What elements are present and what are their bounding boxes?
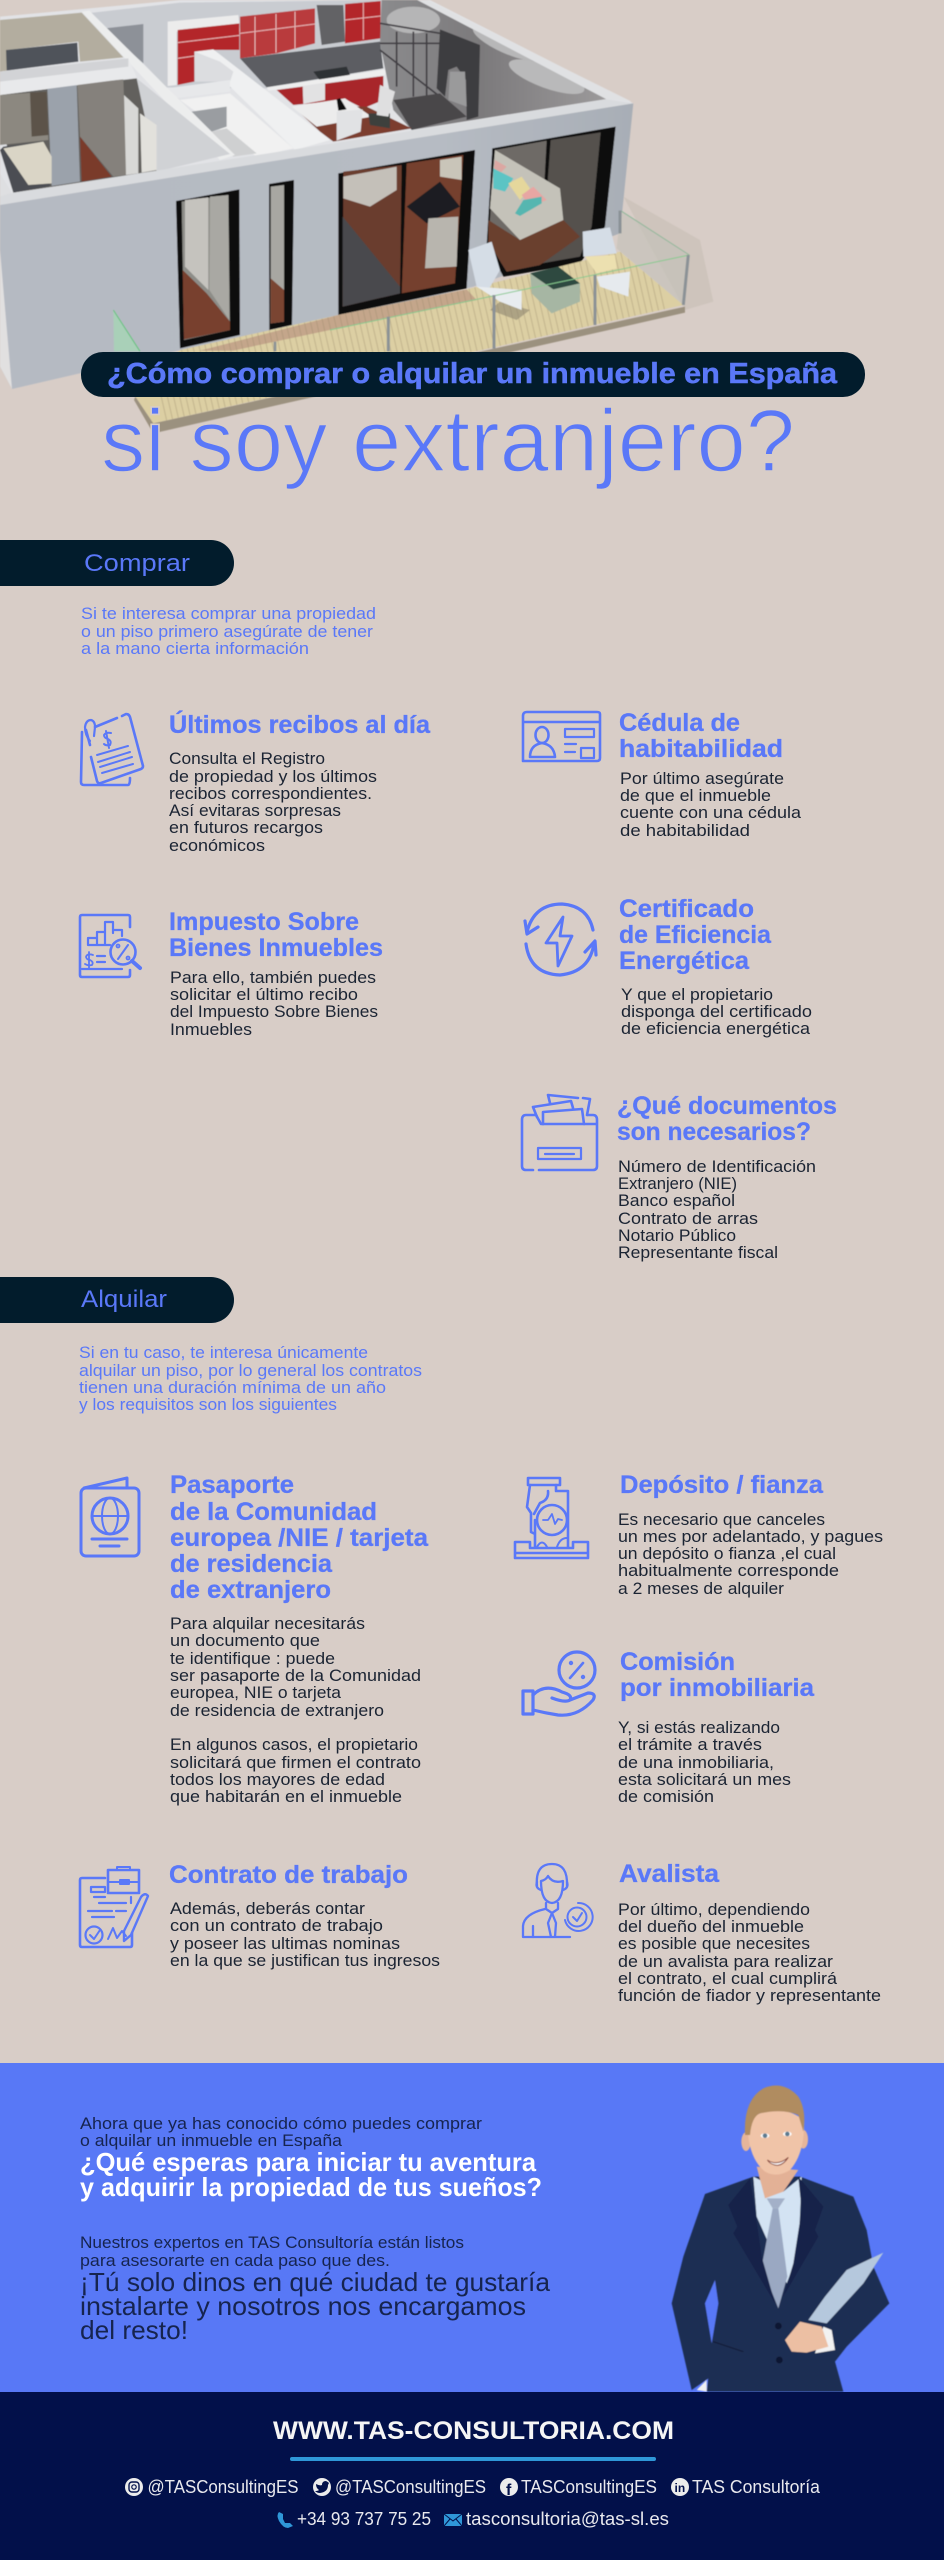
item: Depósito / fianza: Es necesario que canceles xyxy=(618,1511,825,1529)
item: Comisión por inmobiliaria: Y, si estás realizando xyxy=(618,1719,780,1737)
social: facebook: f xyxy=(506,2482,512,2499)
contact: email: tasconsultoria@tas-sl.es xyxy=(466,2509,669,2529)
item: ¿Qué documentos son necesarios?: Notario Público xyxy=(618,1227,736,1245)
item: Pasaporte: te identifique : puede xyxy=(170,1650,335,1668)
social: linkedin: TAS Consultoría xyxy=(692,2477,821,2497)
item: ¿Qué documentos son necesarios? xyxy=(617,1092,837,1262)
item: Pasaporte: de la Comunidad xyxy=(170,1498,377,1526)
item: Últimos recibos al día: Así evitaras sorpresas xyxy=(169,802,341,820)
intro text: Alquilar xyxy=(79,1344,422,1414)
item: Comisión por inmobiliaria: de una inmobiliaria, xyxy=(618,1754,774,1772)
item: ¿Qué documentos son necesarios?: Extranjero (NIE) xyxy=(618,1175,737,1193)
intro text: Comprar: Si te interesa comprar una propiedad xyxy=(81,605,376,623)
item: Pasaporte xyxy=(170,1471,429,1806)
item: Pasaporte: de extranjero xyxy=(170,1576,331,1604)
intro text: Alquilar: y los requisitos son los siguientes xyxy=(79,1396,337,1414)
item: Impuesto Sobre Bienes Inmuebles: Impuesto Sobre xyxy=(169,908,359,936)
item: ¿Qué documentos son necesarios?: Número de Identificación xyxy=(618,1158,816,1176)
item: Avalista: Por último, dependiendo xyxy=(618,1901,810,1919)
item: Impuesto Sobre Bienes Inmuebles xyxy=(169,908,383,1039)
intro text: Comprar: a la mano cierta información xyxy=(81,640,309,658)
title line 1: ¿Cómo comprar o alquilar un inmueble en España xyxy=(107,358,838,390)
text: closing message: instalarte y nosotros nos encargamos xyxy=(80,2291,526,2321)
item: Pasaporte: En algunos casos, el propietario xyxy=(170,1736,418,1754)
item: Depósito / fianza: Depósito / fianza xyxy=(620,1471,824,1499)
item: Impuesto Sobre Bienes Inmuebles: del Impuesto Sobre Bienes xyxy=(170,1003,378,1021)
intro text: Alquilar: Si en tu caso, te interesa únicamente xyxy=(79,1344,368,1362)
item: Impuesto Sobre Bienes Inmuebles: Bienes Inmuebles xyxy=(169,934,383,962)
icon: deposit xyxy=(515,1478,588,1558)
text: intro question: o alquilar un inmueble en España xyxy=(80,2132,343,2150)
item: Últimos recibos al día: Consulta el Registro xyxy=(169,750,325,768)
item: Cédula de habitabilidad: habitabilidad xyxy=(619,735,783,763)
item: Contrato de trabajo: en la que se justifican tus ingresos xyxy=(170,1952,440,1970)
item: Cédula de habitabilidad: Cédula de xyxy=(619,709,740,737)
item: Certificado de Eficiencia Energética: disponga del certificado xyxy=(621,1003,812,1021)
panel: footer xyxy=(0,2392,944,2560)
text: intro question xyxy=(80,2115,483,2150)
icon: energy cycle xyxy=(525,904,596,975)
item: Pasaporte: Para alquilar necesitarás xyxy=(170,1615,365,1633)
intro text: Comprar: o un piso primero asegúrate de tener xyxy=(81,623,374,641)
intro text: Alquilar: tienen una duración mínima de un año xyxy=(79,1379,386,1397)
item: Comisión por inmobiliaria xyxy=(618,1648,815,1806)
item: Comisión por inmobiliaria: de comisión xyxy=(618,1788,714,1806)
item: Certificado de Eficiencia Energética xyxy=(619,895,812,1038)
item: Últimos recibos al día: económicos xyxy=(169,837,265,855)
item: Pasaporte: que habitarán en el inmueble xyxy=(170,1788,402,1806)
text: highlighted question: y adquirir la propiedad de tus sueños? xyxy=(80,2172,542,2202)
item: Certificado de Eficiencia Energética: Certificado xyxy=(619,895,754,923)
item: Pasaporte: de residencia de extranjero xyxy=(170,1702,384,1720)
item: Cédula de habitabilidad: de habitabilidad xyxy=(620,822,750,840)
item: Comisión por inmobiliaria: el trámite a través xyxy=(618,1736,762,1754)
item: ¿Qué documentos son necesarios?: son necesarios? xyxy=(617,1118,811,1146)
item: Avalista xyxy=(618,1860,881,2005)
photo: consultant in suit xyxy=(672,2086,889,2392)
item: Cédula de habitabilidad: cuente con una cédula xyxy=(620,804,802,822)
website: WWW.TAS-CONSULTORIA.COM xyxy=(273,2417,674,2445)
item: Contrato de trabajo: Además, deberás contar xyxy=(170,1900,366,1918)
item: Avalista: el contrato, el cual cumplirá xyxy=(618,1970,838,1988)
item: Contrato de trabajo xyxy=(169,1861,440,1970)
icon: passport xyxy=(81,1478,139,1556)
item: Pasaporte: ser pasaporte de la Comunidad xyxy=(170,1667,421,1685)
text: experts xyxy=(80,2234,464,2270)
item: Depósito / fianza: un depósito o fianza ,el cual xyxy=(618,1545,836,1563)
text: closing message: ¡Tú solo dinos en qué ciudad te gustaría xyxy=(80,2267,551,2297)
icon: work contract xyxy=(80,1867,148,1947)
item: Últimos recibos al día xyxy=(169,709,431,855)
divider xyxy=(290,2457,656,2461)
item: Cédula de habitabilidad: Por último asegúrate xyxy=(620,770,784,788)
panel: call to action xyxy=(0,2063,944,2392)
icon: commission hand xyxy=(523,1652,595,1715)
item: Contrato de trabajo: Contrato de trabajo xyxy=(169,1861,408,1889)
item: Depósito / fianza: a 2 meses de alquiler xyxy=(618,1580,785,1598)
item: Depósito / fianza: un mes por adelantado, y pagues xyxy=(618,1528,883,1546)
icon: ID card xyxy=(523,712,600,761)
item: Certificado de Eficiencia Energética: de Eficiencia xyxy=(619,921,772,949)
item: Pasaporte: europea, NIE o tarjeta xyxy=(170,1684,342,1702)
icon: receipts xyxy=(81,714,143,785)
item: Comisión por inmobiliaria: por inmobiliaria xyxy=(620,1674,815,1702)
item: Comisión por inmobiliaria: esta solicitará un mes xyxy=(618,1771,791,1789)
item: ¿Qué documentos son necesarios?: Representante fiscal xyxy=(618,1244,778,1262)
text: highlighted question xyxy=(80,2147,542,2202)
item: ¿Qué documentos son necesarios?: Banco español xyxy=(618,1192,735,1210)
text: experts: para asesorarte en cada paso que des. xyxy=(80,2252,390,2270)
item: Últimos recibos al día: en futuros recargos xyxy=(169,819,323,837)
item: Pasaporte: Pasaporte xyxy=(170,1471,294,1499)
item: Cédula de habitabilidad xyxy=(619,709,802,840)
social: instagram: @TASConsultingES xyxy=(148,2477,298,2497)
icon: tax report xyxy=(80,915,140,977)
item: Avalista: función de fiador y representante xyxy=(618,1987,881,2005)
item: Contrato de trabajo: con un contrato de trabajo xyxy=(170,1917,383,1935)
item: Últimos recibos al día: Últimos recibos al día xyxy=(169,709,431,739)
item: Avalista: del dueño del inmueble xyxy=(618,1918,804,1936)
item: Pasaporte: un documento que xyxy=(170,1632,320,1650)
text: highlighted question: ¿Qué esperas para iniciar tu aventura xyxy=(80,2147,537,2177)
item: Avalista: es posible que necesites xyxy=(618,1935,810,1953)
text: closing message xyxy=(80,2267,551,2345)
text: closing message: del resto! xyxy=(80,2315,188,2345)
item: Últimos recibos al día: recibos correspondientes. xyxy=(169,785,372,803)
section pill: Comprar xyxy=(0,540,234,586)
item: Cédula de habitabilidad: de que el inmueble xyxy=(620,787,771,805)
item: Certificado de Eficiencia Energética: Y que el propietario xyxy=(621,986,773,1004)
title pill xyxy=(81,352,865,397)
item: Avalista: de un avalista para realizar xyxy=(618,1953,834,1971)
item: Pasaporte: todos los mayores de edad xyxy=(170,1771,385,1789)
item: Certificado de Eficiencia Energética: de eficiencia energética xyxy=(621,1020,811,1038)
section pill: Alquilar xyxy=(0,1277,234,1323)
icon: guarantor xyxy=(523,1864,593,1937)
item: Impuesto Sobre Bienes Inmuebles: Inmuebles xyxy=(170,1021,252,1039)
intro text: Comprar xyxy=(81,605,376,658)
section pill: Comprar: Comprar xyxy=(84,550,190,577)
social: facebook: TASConsultingES xyxy=(521,2477,657,2497)
social: linkedin: in xyxy=(674,2481,685,2495)
intro text: Alquilar: alquilar un piso, por lo general los contratos xyxy=(79,1362,422,1380)
item: Pasaporte: de residencia xyxy=(170,1550,333,1578)
item: Pasaporte: europea /NIE / tarjeta xyxy=(170,1524,429,1552)
item: ¿Qué documentos son necesarios?: ¿Qué documentos xyxy=(617,1092,837,1120)
item: Impuesto Sobre Bienes Inmuebles: Para ello, también puedes xyxy=(170,969,376,987)
social: twitter: @TASConsultingES xyxy=(335,2477,486,2497)
item: Pasaporte: solicitará que firmen el contrato xyxy=(170,1754,421,1772)
item: Certificado de Eficiencia Energética: Energética xyxy=(619,947,750,975)
item: Depósito / fianza: habitualmente corresponde xyxy=(618,1562,839,1580)
item: Depósito / fianza xyxy=(618,1471,883,1598)
icon: document folder xyxy=(522,1095,597,1170)
hero illustration: 3D apartment xyxy=(0,0,713,433)
item: Comisión por inmobiliaria: Comisión xyxy=(620,1648,735,1676)
item: Avalista: Avalista xyxy=(619,1860,720,1888)
item: Últimos recibos al día: de propiedad y los últimos xyxy=(169,768,377,786)
item: ¿Qué documentos son necesarios?: Contrato de arras xyxy=(618,1210,758,1228)
contact: phone: +34 93 737 75 25 xyxy=(297,2509,431,2529)
title line 2: si soy extranjero? xyxy=(101,391,795,490)
text: intro question: Ahora que ya has conocido cómo puedes comprar xyxy=(80,2115,483,2133)
item: Contrato de trabajo: y poseer las ultimas nominas xyxy=(170,1935,400,1953)
text: experts: Nuestros expertos en TAS Consultoría están listos xyxy=(80,2234,464,2252)
section pill: Alquilar: Alquilar xyxy=(81,1286,167,1313)
item: Impuesto Sobre Bienes Inmuebles: solicitar el último recibo xyxy=(170,986,358,1004)
